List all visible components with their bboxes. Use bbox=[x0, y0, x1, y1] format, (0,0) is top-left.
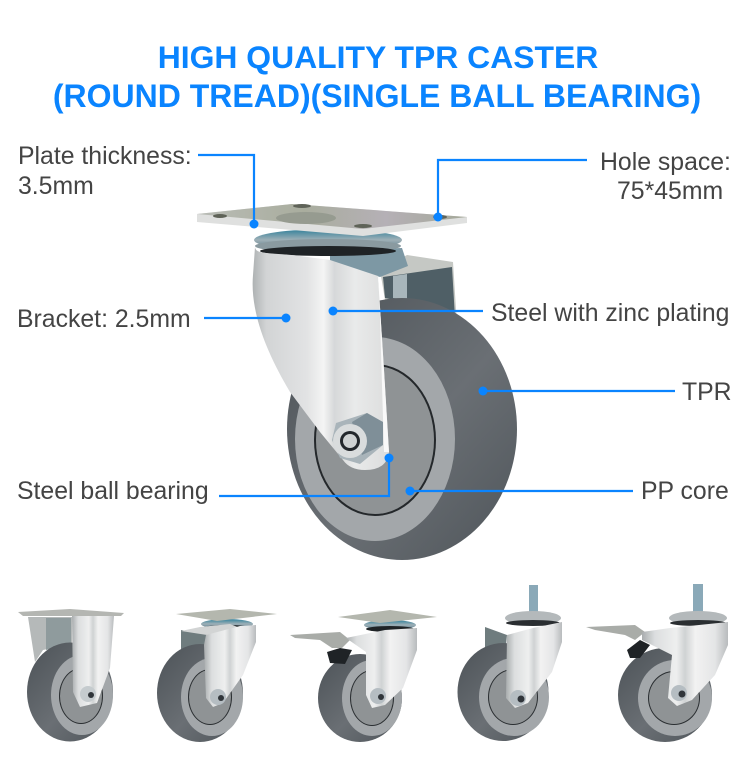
label: TPR bbox=[478, 379, 732, 406]
variant: swivel caster with brake bbox=[290, 610, 437, 742]
label: bracket bbox=[17, 306, 290, 333]
variant: threaded stem caster bbox=[458, 585, 562, 741]
wheel tread bbox=[287, 298, 517, 560]
label: plate thickness bbox=[18, 143, 258, 228]
label: steel with zinc plating: Steel with zinc plating bbox=[491, 300, 729, 327]
wheel light ring bbox=[295, 337, 455, 541]
label: bracket: Bracket: 2.5mm bbox=[17, 306, 191, 333]
variant: fixed caster bbox=[18, 609, 124, 742]
variant: threaded stem caster with brake bbox=[586, 584, 728, 742]
title bbox=[53, 39, 701, 114]
top plate bbox=[197, 204, 467, 236]
title: (ROUND TREAD)(SINGLE BALL BEARING) bbox=[53, 78, 701, 114]
label: plate thickness: Plate thickness: bbox=[18, 143, 192, 170]
label: steel ball bearing: Steel ball bearing bbox=[17, 478, 209, 505]
front bracket bbox=[253, 247, 389, 470]
label: PP core bbox=[406, 478, 729, 505]
label: steel with zinc plating bbox=[328, 300, 729, 327]
variant: swivel caster bbox=[157, 609, 277, 742]
label: hole space: 75*45mm bbox=[617, 178, 723, 205]
back bracket bbox=[380, 255, 457, 325]
label: hole space bbox=[434, 149, 731, 222]
bearing nut bbox=[332, 413, 383, 464]
label: TPR: TPR bbox=[682, 379, 732, 406]
title: HIGH QUALITY TPR CASTER bbox=[158, 39, 598, 75]
main caster photo bbox=[197, 204, 517, 560]
label: PP core: PP core bbox=[641, 478, 729, 505]
wheel core bbox=[314, 364, 436, 516]
swivel rings bbox=[254, 229, 408, 277]
label: plate thickness: 3.5mm bbox=[18, 173, 94, 200]
label: hole space: Hole space: bbox=[600, 149, 731, 176]
label: steel ball bearing bbox=[17, 454, 394, 505]
